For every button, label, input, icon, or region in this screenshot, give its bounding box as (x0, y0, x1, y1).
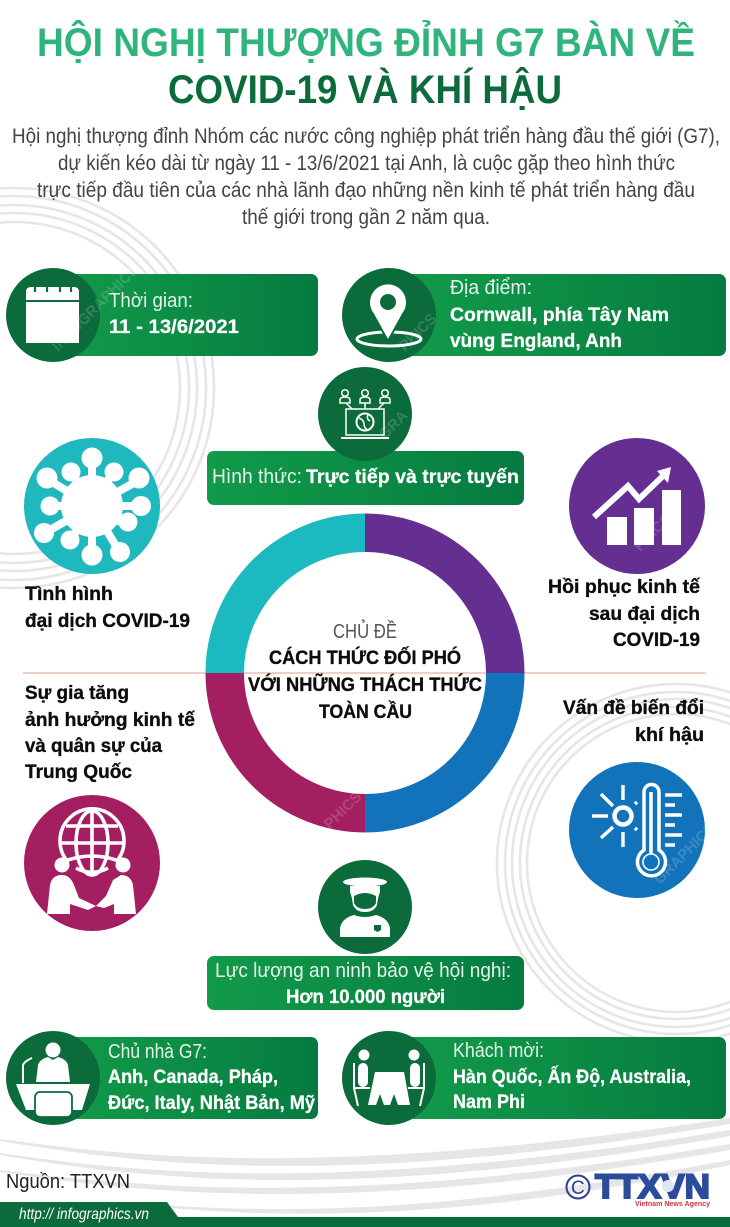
center text: theme: TOÀN CẦU (319, 700, 412, 723)
icon: economic growth (569, 438, 705, 574)
panel: format: Hình thức: (212, 465, 302, 488)
panel: guests (342, 1031, 726, 1125)
text: GRA (376, 407, 412, 443)
panel: guests: Hàn Quốc, Ấn Độ, Australia, (453, 1065, 691, 1088)
intro text: dự kiến kéo dài từ ngày 11 - 13/6/2021 tại Anh, là cuộc gặp theo hình thức (58, 152, 675, 175)
panel: format: Trực tiếp và trực tuyến (306, 466, 519, 488)
panel: guests: Nam Phi (453, 1091, 525, 1113)
intro text (12, 125, 720, 229)
panel: location: Địa điểm: (450, 276, 532, 299)
icon: meeting table (354, 1050, 424, 1106)
panel: security: Lực lượng an ninh bảo vệ hội nghị: (215, 959, 511, 982)
label: covid: đại dịch COVID-19 (25, 610, 190, 632)
panel: location: vùng England, Anh (450, 330, 622, 352)
logo: TTXVN: TTXVN (595, 1168, 710, 1206)
icon: map pin (357, 283, 421, 346)
label: covid: Tình hình (25, 583, 113, 605)
label: recovery (548, 576, 700, 651)
panel: security (207, 860, 524, 1010)
label: climate (563, 697, 704, 746)
logo: TTXVN: C (571, 1178, 585, 1199)
panel: time: Thời gian: (109, 289, 193, 312)
label: recovery: sau đại dịch (589, 603, 700, 625)
label: climate: Vấn đề biến đổi (563, 697, 704, 719)
icon: virus (24, 438, 160, 574)
donut chart (225, 533, 505, 813)
center text: theme: VỚI NHỮNG THÁCH THỨC (248, 672, 482, 696)
panel: guests: Khách mời: (453, 1039, 544, 1062)
footer bar (0, 1202, 730, 1227)
label: china: ảnh hưởng kinh tế (25, 709, 195, 731)
panel: security: Hơn 10.000 người (286, 986, 445, 1008)
title: COVID-19 VÀ KHÍ HẬU (168, 66, 562, 112)
text: INFOGRAPHICS (49, 261, 142, 355)
panel: host: Đức, Italy, Nhật Bản, Mỹ (108, 1092, 315, 1114)
label: climate: khí hậu (635, 724, 704, 746)
source: Nguồn: TTXVN (6, 1170, 130, 1193)
panel: location (342, 268, 726, 362)
icon: speaker at podium (16, 1042, 90, 1117)
icon: globe and handshake (24, 795, 160, 931)
intro text: thế giới trong gần 2 năm qua. (242, 206, 490, 229)
title: HỘI NGHỊ THƯỢNG ĐỈNH G7 BÀN VỀ (37, 19, 695, 65)
label: covid (25, 583, 190, 632)
panel: location: Cornwall, phía Tây Nam (450, 304, 669, 326)
text: PHICS (321, 788, 365, 833)
text: GRAPHICS (651, 820, 719, 888)
panel: host: Chủ nhà G7: (108, 1040, 207, 1063)
center text: theme: CHỦ ĐỀ (333, 619, 397, 643)
icon: online meeting (340, 390, 390, 438)
label: recovery: Hồi phục kinh tế (548, 576, 700, 598)
label: china: Trung Quốc (25, 761, 132, 783)
icon: thermometer and sun (569, 762, 705, 898)
panel: time (6, 268, 318, 362)
center text: theme (248, 619, 482, 723)
logo: TTXVN: Vietnam News Agency (635, 1201, 710, 1208)
text: PHICS (396, 310, 440, 355)
center text: theme: CÁCH THỨC ĐỐI PHÓ (269, 645, 461, 669)
panel: host: Anh, Canada, Pháp, (108, 1066, 278, 1088)
panel: host (6, 1031, 318, 1125)
label: china (25, 682, 195, 783)
panel: time: 11 - 13/6/2021 (109, 316, 239, 338)
label: china: Sự gia tăng (25, 682, 129, 704)
label: china: và quân sự của (25, 735, 162, 757)
icon: security officer (340, 878, 390, 937)
label: recovery: COVID-19 (613, 629, 700, 651)
icon: calendar (26, 287, 79, 343)
panel: format (207, 367, 524, 505)
divider line (23, 672, 706, 674)
footer bar: http:// infographics.vn (19, 1206, 149, 1223)
text: PHICS (631, 510, 675, 555)
title (37, 19, 695, 112)
